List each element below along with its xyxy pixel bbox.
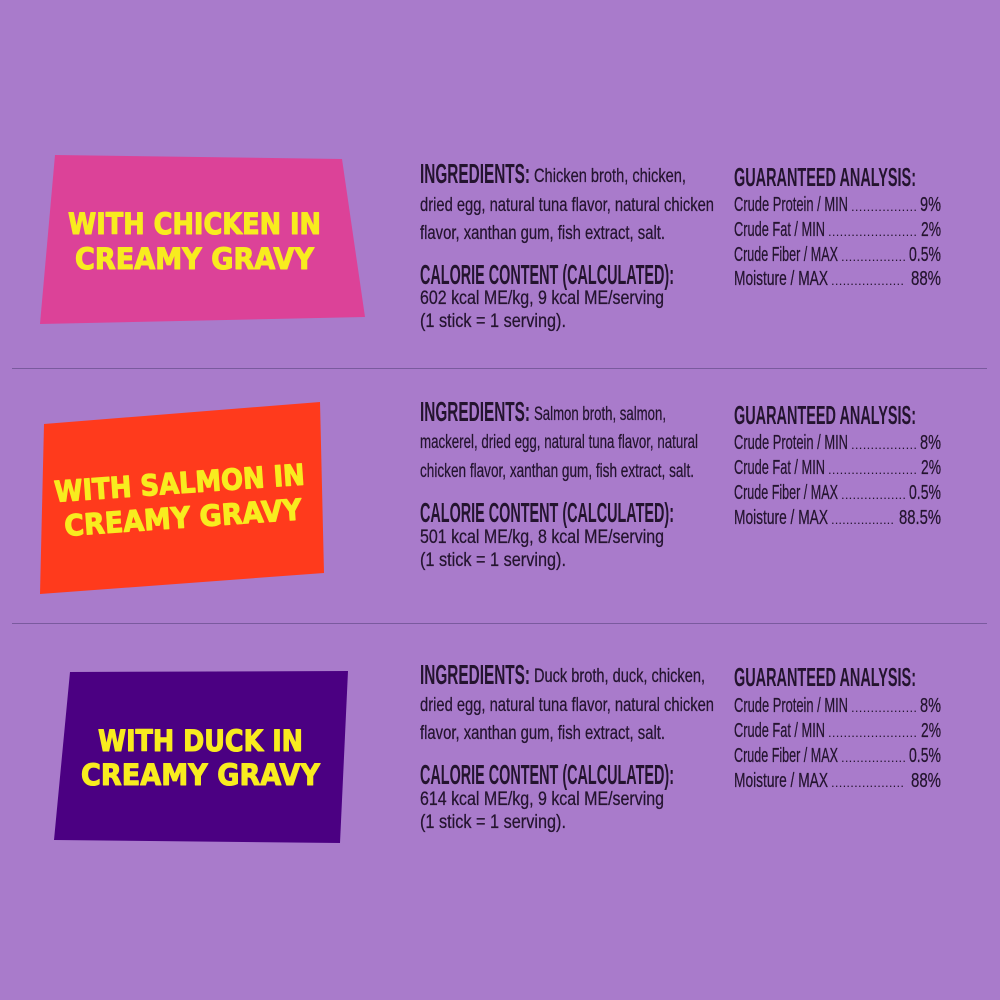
text block: salmon guaranteed analysis: .................	[831, 512, 894, 527]
text block: duck guaranteed analysis: 8%	[920, 695, 941, 717]
text block: salmon ingredients: Salmon broth, salmon,	[534, 404, 666, 425]
text block: duck guaranteed analysis: .......................	[828, 725, 917, 740]
text block: duck guaranteed analysis: 2%	[921, 720, 941, 742]
text block: salmon guaranteed analysis: Crude Protein / MIN	[734, 432, 848, 454]
text block: duck guaranteed analysis: 88%	[911, 770, 941, 792]
text block: salmon guaranteed analysis: .......................	[828, 462, 917, 477]
text block: salmon guaranteed analysis: Crude Fat / MIN	[734, 457, 825, 479]
text block: chicken guaranteed analysis: 0.5%	[909, 244, 941, 266]
text block: duck guaranteed analysis	[734, 662, 941, 792]
text block: chicken guaranteed analysis	[734, 162, 941, 290]
panel: chicken label: CREAMY GRAVY	[75, 242, 315, 276]
text block: chicken guaranteed analysis: .................	[841, 249, 906, 264]
text block: duck guaranteed analysis: Crude Protein / MIN	[734, 695, 848, 717]
text block: salmon guaranteed analysis: 88.5%	[899, 507, 941, 529]
panel: duck label: WITH DUCK IN	[98, 724, 303, 758]
text block: duck calorie content: (1 stick = 1 serving).	[420, 812, 566, 833]
panel: duck label	[54, 671, 348, 843]
text block: chicken calorie content	[420, 259, 674, 332]
text block: chicken guaranteed analysis: 88%	[911, 268, 941, 290]
text block: salmon guaranteed analysis: 2%	[921, 457, 941, 479]
text block: chicken ingredients: flavor, xanthan gum, fish extract, salt.	[420, 223, 665, 244]
panel: chicken label	[40, 155, 365, 324]
text block: chicken guaranteed analysis: ...................	[831, 273, 904, 288]
text block: duck guaranteed analysis: .................	[841, 750, 906, 765]
text block: chicken guaranteed analysis: Crude Fiber / MAX	[734, 244, 838, 266]
text block: duck guaranteed analysis: Moisture / MAX	[734, 770, 828, 792]
text block: duck guaranteed analysis: 0.5%	[909, 745, 941, 767]
text block: salmon calorie content: CALORIE CONTENT (CALCULATED):	[420, 497, 674, 528]
text block: chicken calorie content: (1 stick = 1 serving).	[420, 311, 566, 332]
text block: salmon calorie content: (1 stick = 1 serving).	[420, 550, 566, 571]
text block: chicken calorie content: 602 kcal ME/kg, 9 kcal ME/serving	[420, 288, 664, 309]
text block: duck guaranteed analysis: Crude Fat / MIN	[734, 720, 825, 742]
text block: salmon guaranteed analysis: 0.5%	[909, 482, 941, 504]
text block: duck calorie content: 614 kcal ME/kg, 9 kcal ME/serving	[420, 789, 664, 810]
text block: salmon ingredients: INGREDIENTS:	[420, 396, 530, 427]
text block: salmon calorie content	[420, 497, 674, 571]
text block: salmon ingredients: mackerel, dried egg, natural tuna flavor, natural	[420, 432, 698, 453]
text block: salmon calorie content: 501 kcal ME/kg, 8 kcal ME/serving	[420, 527, 664, 548]
text block: duck ingredients: dried egg, natural tuna flavor, natural chicken	[420, 695, 714, 716]
text block: duck ingredients: Duck broth, duck, chicken,	[534, 666, 705, 687]
panel: chicken label: WITH CHICKEN IN	[68, 207, 321, 241]
text block: salmon ingredients: chicken flavor, xanthan gum, fish extract, salt.	[420, 461, 694, 482]
panel: salmon label: CREAMY GRAVY	[63, 492, 304, 543]
text block: duck calorie content: CALORIE CONTENT (CALCULATED):	[420, 759, 674, 790]
panel: salmon label: WITH SALMON IN	[53, 458, 306, 509]
text block: chicken guaranteed analysis: Crude Fat / MIN	[734, 219, 825, 241]
text block: chicken ingredients	[420, 158, 714, 244]
text block: chicken ingredients: INGREDIENTS:	[420, 158, 530, 189]
text block: chicken guaranteed analysis: .................	[851, 199, 917, 214]
text block: duck guaranteed analysis: ...................	[831, 775, 904, 790]
text block: chicken calorie content: CALORIE CONTENT (CALCULATED):	[420, 259, 674, 290]
text block: salmon guaranteed analysis	[734, 400, 941, 529]
panel: salmon label	[40, 402, 324, 594]
text block: duck ingredients: INGREDIENTS:	[420, 659, 530, 690]
text block: salmon ingredients	[420, 396, 698, 482]
text block: chicken ingredients: dried egg, natural tuna flavor, natural chicken	[420, 195, 714, 216]
text block: duck ingredients: flavor, xanthan gum, fish extract, salt.	[420, 723, 665, 744]
text block: chicken ingredients: Chicken broth, chicken,	[534, 166, 686, 187]
text block: chicken guaranteed analysis: 2%	[921, 219, 941, 241]
text block: duck guaranteed analysis: Crude Fiber / MAX	[734, 745, 838, 767]
text block: duck guaranteed analysis: .................	[851, 700, 917, 715]
panel: duck label: CREAMY GRAVY	[81, 758, 321, 792]
text block: salmon guaranteed analysis: Crude Fiber / MAX	[734, 482, 838, 504]
text block: chicken guaranteed analysis: Moisture / MAX	[734, 268, 828, 290]
text block: salmon guaranteed analysis: .................	[851, 437, 917, 452]
text block: chicken guaranteed analysis: .......................	[828, 224, 917, 239]
text block: chicken guaranteed analysis: 9%	[920, 194, 941, 216]
text block: salmon guaranteed analysis: 8%	[920, 432, 941, 454]
text block: duck calorie content	[420, 759, 674, 833]
text block: salmon guaranteed analysis: .................	[841, 487, 906, 502]
text block: salmon guaranteed analysis: Moisture / MAX	[734, 507, 828, 529]
text block: duck ingredients	[420, 659, 714, 744]
text block: chicken guaranteed analysis: Crude Protein / MIN	[734, 194, 848, 216]
